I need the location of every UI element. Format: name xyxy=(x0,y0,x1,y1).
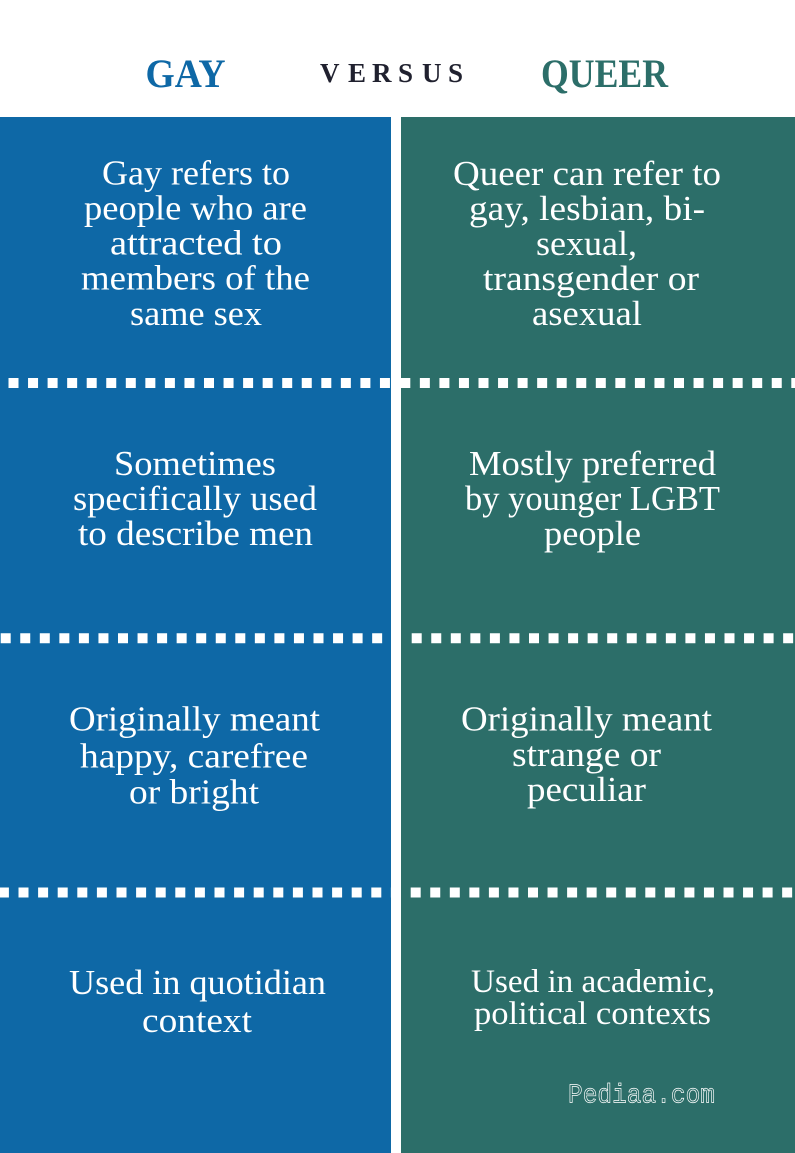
text block: gay definition: Gay refers to xyxy=(102,154,290,192)
text block: queer original meaning: peculiar xyxy=(527,770,646,809)
dotted divider row 1 right xyxy=(400,378,795,388)
text block: gay definition: members of the xyxy=(81,258,310,298)
text block: gay usage: to describe men xyxy=(78,514,313,553)
dotted divider row 3 left xyxy=(0,888,401,898)
text block: queer definition: transgender or xyxy=(483,259,699,298)
text block: queer definition: sexual, xyxy=(536,224,637,263)
text block: gay definition: attracted to xyxy=(110,224,282,262)
text block: queer original meaning: strange or xyxy=(512,735,661,774)
panel: gay column xyxy=(0,117,391,1153)
heading: Queer: QUEER xyxy=(541,51,669,96)
text block: gay definition xyxy=(81,154,310,333)
text block: queer definition: Queer can refer to xyxy=(453,154,721,193)
logo: Pediaa.com: Pediaa.com xyxy=(568,1082,715,1112)
text block: gay definition: same sex xyxy=(130,294,263,333)
text block: queer definition: asexual xyxy=(532,294,642,333)
text block: queer context: political contexts xyxy=(474,996,711,1032)
dotted divider row 2 left xyxy=(1,633,382,643)
text block: queer usage: people xyxy=(544,514,641,553)
text block: gay original meaning: Originally meant xyxy=(69,700,320,738)
text block: gay context: Used in quotidian xyxy=(69,963,326,1002)
panel: queer column xyxy=(401,117,795,1153)
text block: gay original meaning: or bright xyxy=(129,772,259,812)
text block: queer usage: Mostly preferred xyxy=(469,444,717,483)
text block: gay usage xyxy=(73,444,318,553)
text block: queer original meaning xyxy=(461,700,712,809)
text block: queer definition: gay, lesbian, bi- xyxy=(469,189,705,228)
heading: Versus: VERSUS xyxy=(320,58,463,88)
text block: gay usage: Sometimes xyxy=(114,444,276,483)
text block: gay original meaning xyxy=(69,700,320,812)
text block: gay usage: specifically used xyxy=(73,479,318,518)
dotted divider row 1 left xyxy=(8,378,390,388)
text block: queer usage xyxy=(465,444,720,553)
text block: queer context xyxy=(471,964,715,1032)
dotted divider row 3 right xyxy=(411,888,792,898)
text block: gay definition: people who are xyxy=(84,188,307,228)
text block: gay context xyxy=(69,963,326,1040)
text block: queer original meaning: Originally meant xyxy=(461,700,712,738)
text block: gay original meaning: happy, carefree xyxy=(80,736,308,776)
text block: queer definition xyxy=(453,154,721,333)
text block: queer context: Used in academic, xyxy=(471,964,715,1000)
text block: queer usage: by younger LGBT xyxy=(465,479,720,518)
heading: Gay: GAY xyxy=(146,51,226,96)
text block: gay context: context xyxy=(142,1001,252,1040)
dotted divider row 2 right xyxy=(412,633,793,643)
